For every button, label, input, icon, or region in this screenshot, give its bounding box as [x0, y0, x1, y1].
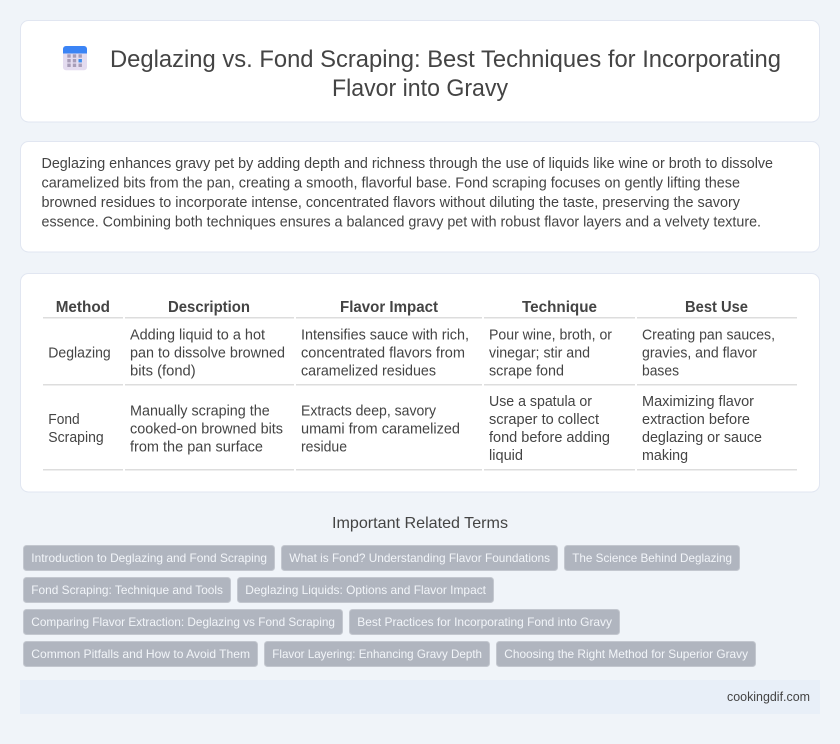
related terms tags	[24, 546, 756, 666]
tag	[564, 546, 740, 570]
title: Flavor into Gravy	[332, 75, 508, 102]
text block: introduction paragraph: Deglazing enhances gravy pet by adding depth and richness through the use of liquids like wine or broth to dissolve	[42, 156, 773, 172]
footer source: cookingdif.com	[727, 690, 810, 704]
table row: Fond Scraping: Use a spatula or	[489, 394, 592, 410]
text block: introduction paragraph: browned residues to incorporate intense, concentrated flavors without diluting the taste, preserving the savory	[42, 195, 741, 211]
table row: Fond Scraping: liquid	[489, 448, 523, 464]
table row: Deglazing	[48, 327, 775, 379]
table row: Deglazing: scrape fond	[489, 363, 564, 379]
tag: Common Pitfalls and How to Avoid Them	[31, 647, 250, 661]
table header row: Flavor Impact	[340, 299, 439, 316]
text block: introduction paragraph: essence. Combining both techniques ensures a balanced gravy pet with robust flavor layers and a velvety texture.	[42, 214, 761, 230]
panel: introduction	[20, 142, 820, 252]
tag: The Science Behind Deglazing	[572, 551, 732, 565]
tag: Introduction to Deglazing and Fond Scraping	[31, 551, 267, 565]
table row: Deglazing: caramelized residues	[301, 363, 436, 379]
table row: Deglazing: gravies, and flavor	[642, 345, 757, 361]
title	[110, 46, 781, 102]
table row: Fond Scraping: fond before adding	[489, 430, 610, 446]
tag	[264, 642, 490, 666]
panel: comparison table	[20, 274, 820, 492]
tag: Choosing the Right Method for Superior Gravy	[504, 647, 748, 661]
tag: Comparing Flavor Extraction: Deglazing vs Fond Scraping	[31, 615, 335, 629]
tag	[24, 578, 230, 602]
table row: Fond Scraping: making	[642, 448, 688, 464]
table row: Deglazing: pan to dissolve browned	[130, 345, 285, 361]
tag	[496, 642, 756, 666]
table header row: Description	[168, 299, 250, 316]
table row: Fond Scraping: Scraping	[48, 430, 104, 446]
table row: Deglazing: Creating pan sauces,	[642, 327, 775, 343]
table header row: Best Use	[685, 299, 748, 316]
panel: title header	[20, 20, 820, 122]
icon: calendar	[63, 46, 87, 70]
text block: introduction paragraph	[42, 156, 773, 230]
tag	[24, 642, 258, 666]
table row: Deglazing: concentrated flavors from	[301, 345, 465, 361]
table row: Fond Scraping: Maximizing flavor	[642, 394, 754, 410]
table row: Deglazing: bits (fond)	[130, 363, 196, 379]
title: Deglazing vs. Fond Scraping: Best Techniques for Incorporating	[110, 46, 781, 73]
table header row	[56, 299, 748, 316]
table row: Fond Scraping: scraper to collect	[489, 412, 599, 428]
tag	[24, 610, 342, 634]
tag	[282, 546, 558, 570]
table row: Deglazing: bases	[642, 363, 679, 379]
tag: Flavor Layering: Enhancing Gravy Depth	[272, 647, 482, 661]
tag: Deglazing Liquids: Options and Flavor Impact	[245, 583, 487, 597]
table row: Deglazing: Deglazing	[48, 345, 111, 361]
table header row: Technique	[522, 299, 597, 316]
tag: Best Practices for Incorporating Fond into Gravy	[357, 615, 612, 629]
tag	[350, 610, 620, 634]
table row: Fond Scraping: residue	[301, 439, 347, 455]
table row: Fond Scraping: umami from caramelized	[301, 421, 460, 437]
table row: Fond Scraping	[48, 394, 762, 464]
tag: Fond Scraping: Technique and Tools	[31, 583, 223, 597]
footer bar	[20, 680, 820, 714]
heading: important related terms: Important Related Terms	[332, 515, 508, 532]
table row: Fond Scraping: deglazing or sauce	[642, 430, 762, 446]
table row: Deglazing: Intensifies sauce with rich,	[301, 327, 469, 343]
table row: Fond Scraping: extraction before	[642, 412, 750, 428]
tag	[238, 578, 494, 602]
table row: Fond Scraping: Manually scraping the	[130, 403, 270, 419]
table row: Deglazing: vinegar; stir and	[489, 345, 590, 361]
table row: Deglazing: Adding liquid to a hot	[130, 327, 265, 343]
table row: Deglazing: Pour wine, broth, or	[489, 327, 612, 343]
table row: Fond Scraping: Fond	[48, 412, 80, 428]
table header row: Method	[56, 299, 110, 316]
tag: What is Fond? Understanding Flavor Foundations	[289, 551, 550, 565]
text block: introduction paragraph: caramelized bits from the pan, creating a smooth, flavorful base. Fond scraping focuses on gently lifting these	[42, 176, 740, 192]
table row: Fond Scraping: cooked-on browned bits	[130, 421, 283, 437]
table row: Fond Scraping: from the pan surface	[130, 439, 263, 455]
table row: Fond Scraping: Extracts deep, savory	[301, 403, 437, 419]
tag	[24, 546, 274, 570]
